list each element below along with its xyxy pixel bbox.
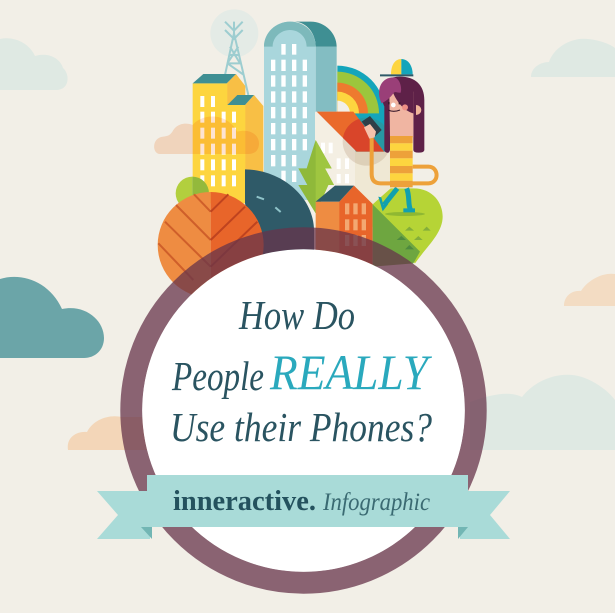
- nose: [391, 103, 396, 107]
- cloud: peach left: [68, 416, 150, 450]
- left tail: [97, 491, 150, 539]
- cloud: teal left: [0, 277, 104, 358]
- yellow buildings: [193, 74, 263, 203]
- cloud: pale right: [470, 375, 615, 450]
- green bush: [176, 177, 209, 210]
- rainbow: [337, 66, 385, 153]
- right tail: [460, 491, 510, 539]
- cheek: [402, 104, 408, 110]
- green hill: [373, 188, 443, 267]
- tall tower: [264, 22, 337, 200]
- line: Use their Phones?: Use their Phones?: [170, 404, 432, 450]
- antenna tower: [225, 22, 248, 95]
- line: People REALLY: [171, 344, 433, 400]
- legs: [384, 188, 411, 210]
- line: People REALLY: People: [171, 353, 264, 399]
- white disc: [142, 249, 465, 572]
- cap: [391, 59, 401, 74]
- highlighted word: REALLY: [269, 344, 433, 400]
- ribbon banner: [97, 475, 510, 539]
- arm: [372, 137, 437, 183]
- brand name: inneractive.: [173, 486, 316, 517]
- infographic label: Infographic: [322, 489, 430, 516]
- light fringe: [379, 77, 401, 103]
- house: [315, 112, 391, 211]
- orange house: [316, 186, 373, 267]
- shirt stripes: [390, 136, 413, 187]
- cloud: peach right: [564, 274, 615, 306]
- cap brim: [380, 74, 413, 76]
- illustration: city and girl: [154, 9, 443, 298]
- cloud: top left: [0, 38, 68, 90]
- dark fringe: [393, 80, 413, 113]
- eyes: [388, 102, 400, 104]
- orange tree: [158, 192, 264, 298]
- pine tree: [298, 140, 334, 213]
- line: How Do: How Do: [238, 292, 355, 338]
- phone: [362, 116, 382, 137]
- hand: [364, 124, 376, 139]
- feet: [378, 197, 415, 212]
- face: [389, 92, 413, 137]
- ring: [131, 238, 476, 583]
- cloud: top right: [531, 39, 615, 77]
- smile: [388, 110, 400, 111]
- girl: [362, 59, 437, 212]
- dark hill with road: [245, 169, 314, 267]
- antenna halo: [210, 9, 258, 57]
- peach cloud over buildings: [154, 116, 259, 154]
- ribbon folds: [141, 527, 468, 539]
- hair: [379, 77, 424, 153]
- title: [170, 292, 433, 450]
- ribbon centre: [147, 475, 468, 527]
- ear: [416, 105, 421, 115]
